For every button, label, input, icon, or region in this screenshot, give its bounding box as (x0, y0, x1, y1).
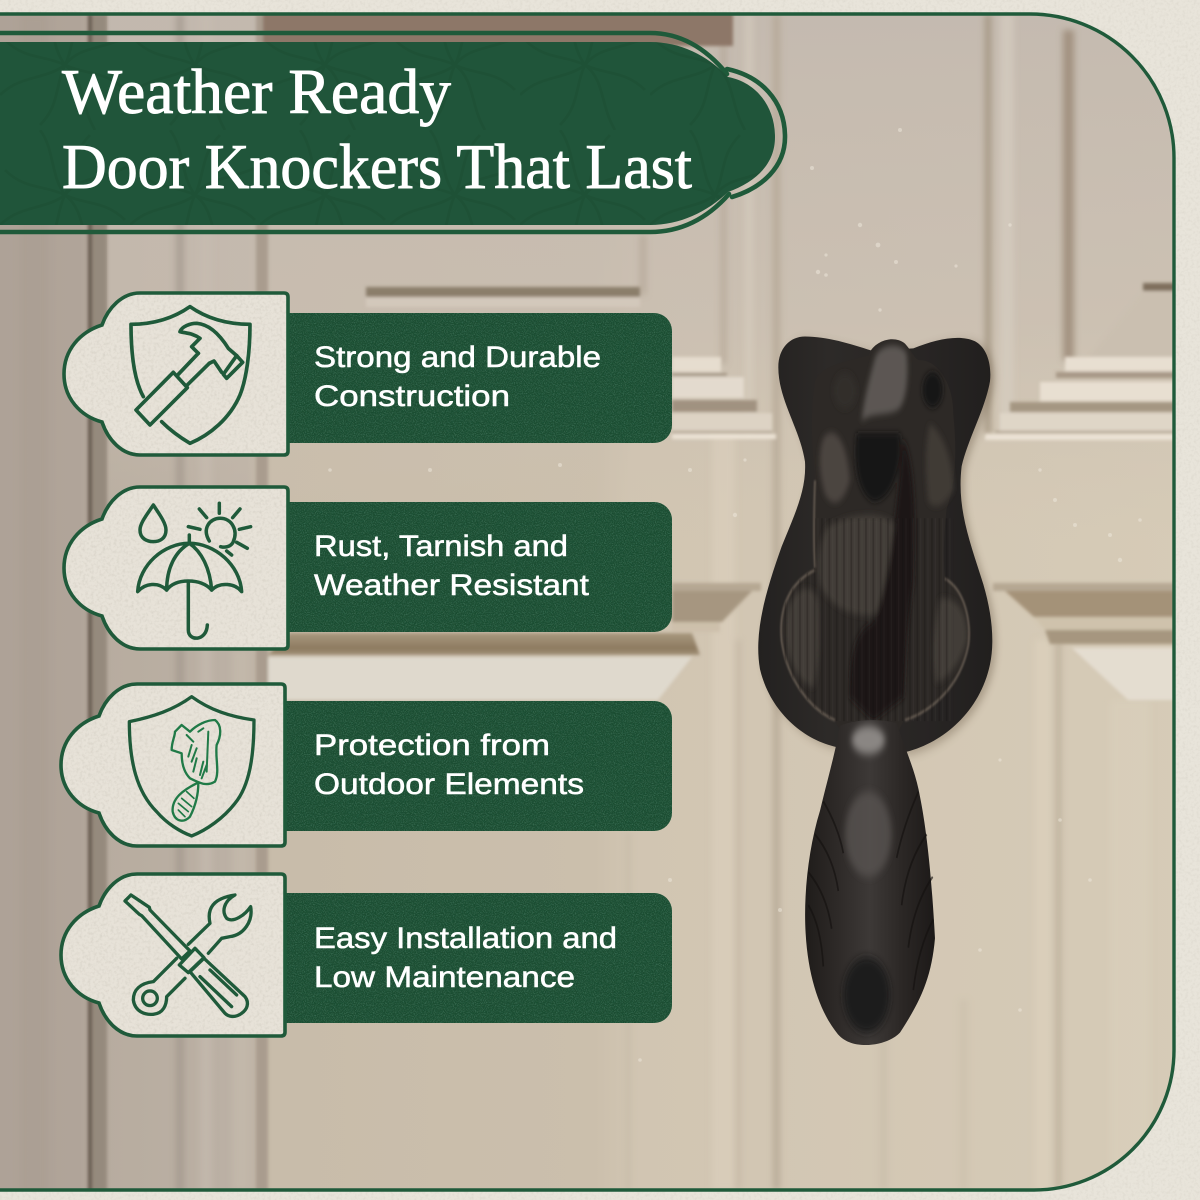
feature 4 text: Easy Installation and (314, 922, 617, 955)
feature 1: strong and durable (60, 290, 672, 460)
feature 4 text: Low Maintenance (314, 961, 575, 994)
feature 3 text: Outdoor Elements (314, 768, 584, 801)
feature 4 text (314, 922, 617, 994)
icon: hammer on shield (131, 307, 250, 443)
feature 2 text (314, 530, 590, 602)
feature 1 tab (60, 290, 292, 460)
feature 3 text (314, 729, 584, 801)
feature 3 bar (285, 701, 672, 831)
feature 2 tab (60, 484, 292, 654)
feature 2 text: Rust, Tarnish and (314, 530, 568, 563)
feature 3 tab (57, 681, 289, 851)
feature 4 bar (285, 893, 672, 1023)
title: Weather Ready (62, 57, 452, 127)
feature 1 text (314, 341, 601, 413)
title (62, 57, 692, 202)
icon: squirrel on shield (129, 697, 254, 836)
feature 1 bar (288, 313, 672, 443)
feature 1 text: Construction (314, 380, 510, 413)
banner outline (0, 33, 785, 232)
icon: umbrella, drop and sun (138, 503, 251, 638)
door knocker: squirrel (758, 337, 996, 1045)
title: Door Knockers That Last (62, 132, 692, 202)
icon: screwdriver and wrench (125, 895, 251, 1016)
feature 3 text: Protection from (314, 729, 550, 762)
water droplets (328, 128, 1142, 1062)
feature 2: rust, tarnish and weather resistant (60, 484, 672, 654)
knocker backplate (758, 337, 992, 752)
knocker rim highlights (781, 480, 969, 720)
feature 3: protection from outdoor elements (57, 681, 672, 851)
door row two (268, 583, 1175, 700)
feature 4 tab (57, 871, 289, 1041)
knocker tail (805, 720, 935, 1045)
knocker rain streaks (780, 518, 953, 721)
knocker shadow (762, 339, 996, 755)
feature 2 text: Weather Resistant (314, 569, 590, 602)
knocker body shading (786, 345, 967, 721)
knocker body (780, 339, 969, 735)
door row one (366, 283, 1176, 440)
feature 4: easy installation (57, 871, 672, 1041)
feature 2 bar (288, 502, 672, 632)
feature 1 text: Strong and Durable (314, 341, 601, 374)
banner (0, 42, 775, 225)
knocker tail highlights (843, 726, 892, 1033)
